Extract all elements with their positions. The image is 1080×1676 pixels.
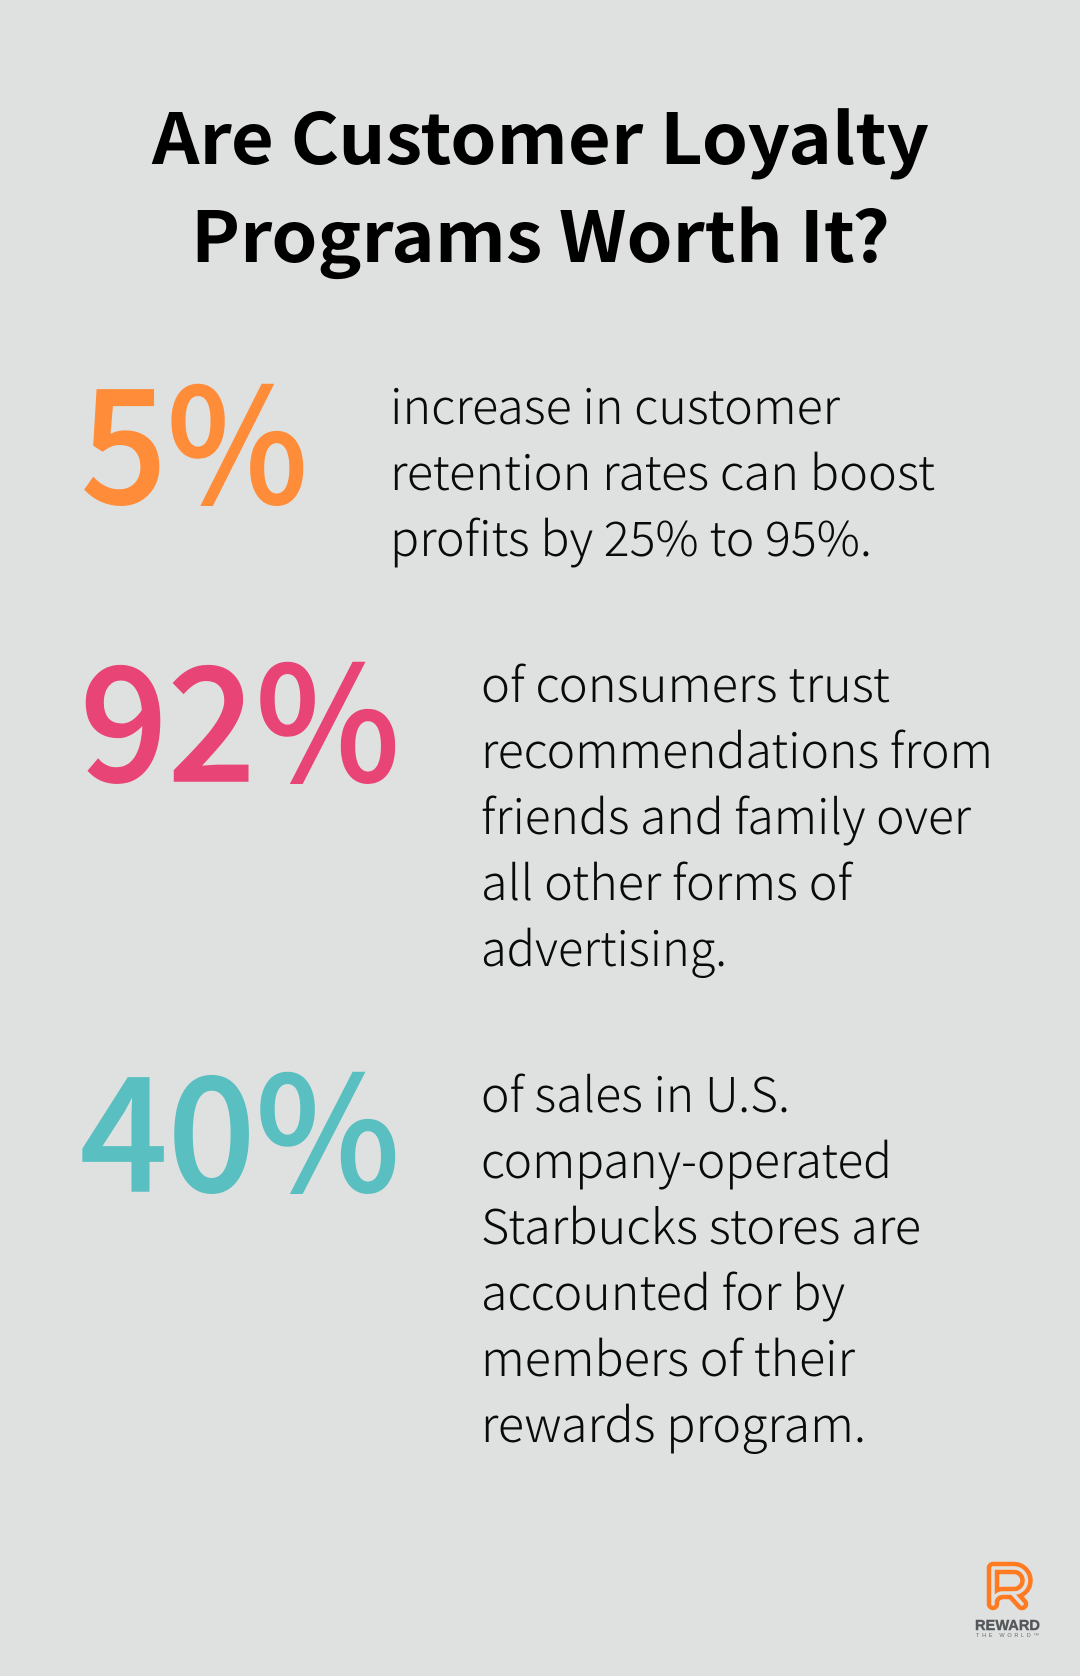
description: 92%: of consumers trust [481,646,890,716]
description: 5%: increase in customer [390,368,841,438]
description: 5% [390,368,935,570]
description: 5%: profits by 25% to 95%. [390,500,872,570]
logo: Reward the World [975,1568,1040,1639]
description: 40%: members of their [481,1320,856,1390]
description: 40%: accounted for by [481,1254,845,1324]
icon: R mark [993,1568,1026,1604]
stat: 5% [81,320,935,570]
description: 40%: Starbucks stores are [481,1188,921,1258]
big number: 92%: 92% [80,598,400,827]
description: 92%: all other forms of [481,844,854,914]
description: 92%: friends and family over [481,778,972,848]
description: 40%: of sales in U.S. [481,1056,790,1126]
big number: 5%: 5% [81,320,308,549]
description: 92%: recommendations from [481,712,993,782]
stat: 40% [80,1008,921,1456]
stat: 92% [80,598,993,980]
description: 92%: advertising. [481,910,727,980]
description: 40% [481,1056,921,1456]
title [151,84,929,283]
description: 40%: rewards program. [481,1386,866,1456]
title: Are Customer Loyalty [151,84,929,185]
wordmark: THE WORLD™ [976,1633,1039,1639]
big number: 40%: 40% [80,1008,400,1237]
description: 40%: company-operated [481,1122,892,1192]
description: 5%: retention rates can boost [390,434,935,504]
title: Programs Worth It? [191,182,890,283]
wordmark: REWARD [975,1617,1040,1634]
description: 92% [481,646,993,980]
